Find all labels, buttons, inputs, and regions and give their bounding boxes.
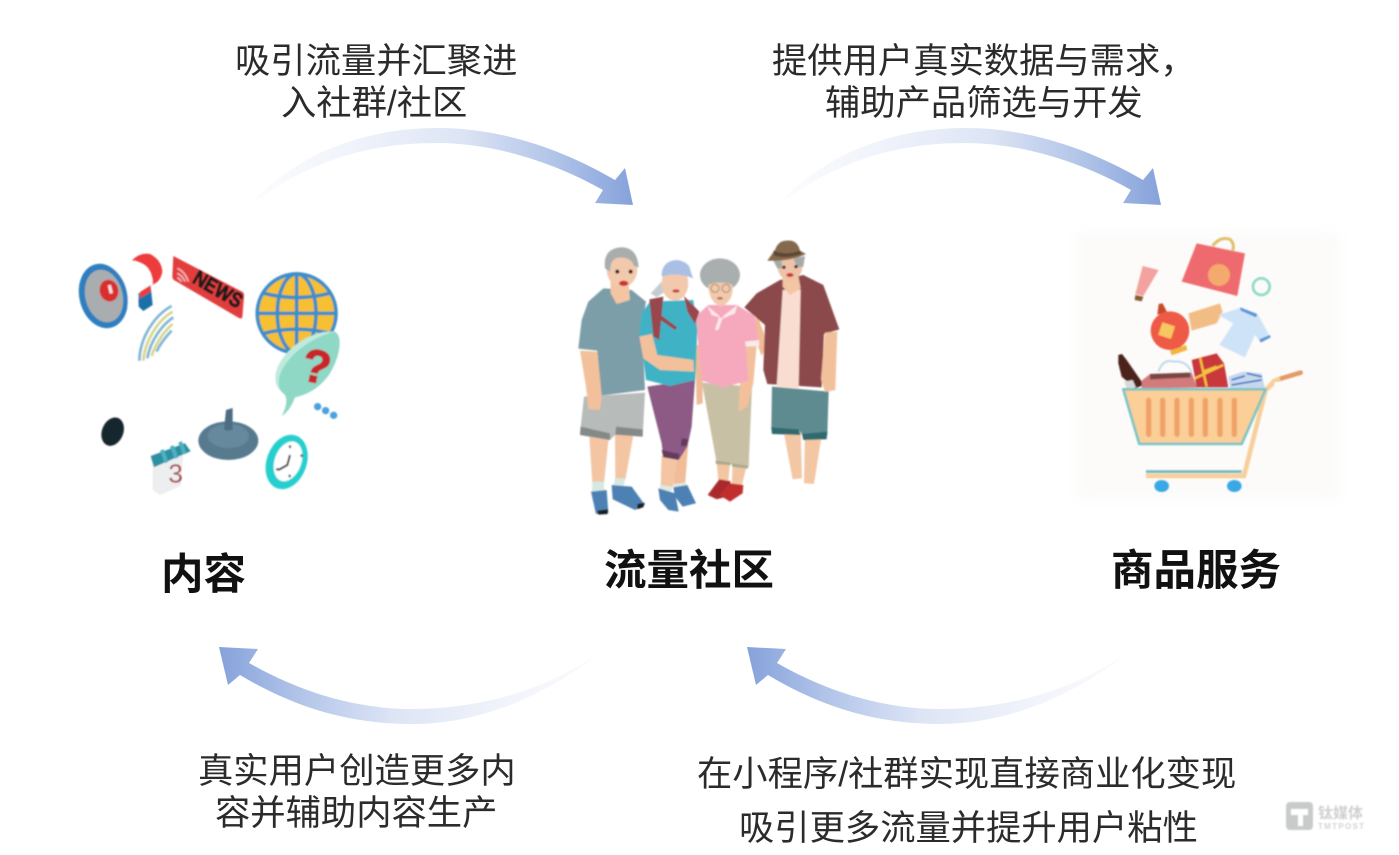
icon: gift bag — [1182, 238, 1245, 296]
caption: user data for products: 辅助产品筛选与开发 — [825, 84, 1143, 123]
icon: wine bottle — [1118, 354, 1144, 388]
watermark: TMTPOST logo: TMTPOST — [1318, 822, 1364, 831]
caption: users create content — [198, 752, 516, 833]
caption: monetisation in mini programs: 在小程序/社群实现直接商业化变现 — [697, 755, 1236, 794]
person 3: pink shirt — [695, 258, 759, 502]
watermark: TMTPOST logo: 钛媒体 — [1318, 804, 1363, 822]
person 1: grey polo — [578, 247, 646, 515]
arrow: content to community — [250, 128, 633, 205]
illustration: four senior people — [578, 241, 839, 515]
caption: user data for products — [772, 42, 1196, 123]
icon: red gift box — [1192, 353, 1228, 387]
caption: monetisation in mini programs — [697, 755, 1236, 848]
caption: users create content: 容并辅助内容生产 — [215, 794, 497, 833]
icon: bracelet ring — [1253, 278, 1270, 295]
watermark: TMTPOST logo — [1286, 802, 1364, 831]
icon: blue boxes — [1228, 372, 1265, 388]
icon: ellipsis dots — [314, 403, 337, 419]
cart frame — [1123, 373, 1301, 492]
icon: signal arcs — [139, 306, 173, 361]
arrow: products to community — [747, 647, 1133, 724]
caption: traffic into community: 入社群/社区 — [281, 84, 467, 123]
illustration: shopping cart with goods — [1075, 232, 1340, 500]
icon: question bubble — [275, 331, 340, 416]
heading: traffic community: 流量社区 — [604, 548, 774, 595]
icon background glow — [1075, 232, 1340, 500]
icon: shopping bag in cart — [1142, 361, 1197, 388]
icon: parcel box — [1188, 303, 1223, 331]
icon: calendar: 3 — [168, 459, 183, 489]
icon: megaphone — [72, 254, 162, 333]
icon: black oval — [97, 414, 128, 449]
icon: news sign — [172, 256, 247, 318]
heading: goods and services: 商品服务 — [1111, 548, 1281, 595]
person 2: cyan shirt and cap — [639, 260, 699, 512]
person 4: hat and maroon shirt — [744, 241, 839, 484]
icon: question bubble: ? — [297, 338, 336, 395]
heading: content: 内容 — [161, 552, 246, 599]
icon group: content media icons — [72, 254, 340, 495]
icon: grey dome — [198, 408, 258, 460]
icon: globe — [257, 273, 337, 353]
arrow: community to content — [219, 647, 605, 724]
caption: users create content: 真实用户创造更多内 — [198, 752, 516, 791]
arrow: community to products — [778, 128, 1161, 205]
icon: calendar — [151, 442, 191, 495]
icon: clock — [258, 429, 315, 495]
caption: user data for products: 提供用户真实数据与需求， — [772, 42, 1196, 81]
icon: blue shirt — [1218, 307, 1271, 357]
icon: news sign: NEWS — [189, 266, 247, 313]
icon: cosmetic tube — [1135, 266, 1159, 301]
caption: traffic into community: 吸引流量并汇聚进 — [235, 42, 517, 81]
icon: red lantern — [1151, 303, 1189, 355]
caption: monetisation in mini programs: 吸引更多流量并提升用户粘性 — [739, 809, 1198, 848]
caption: traffic into community — [235, 42, 517, 123]
